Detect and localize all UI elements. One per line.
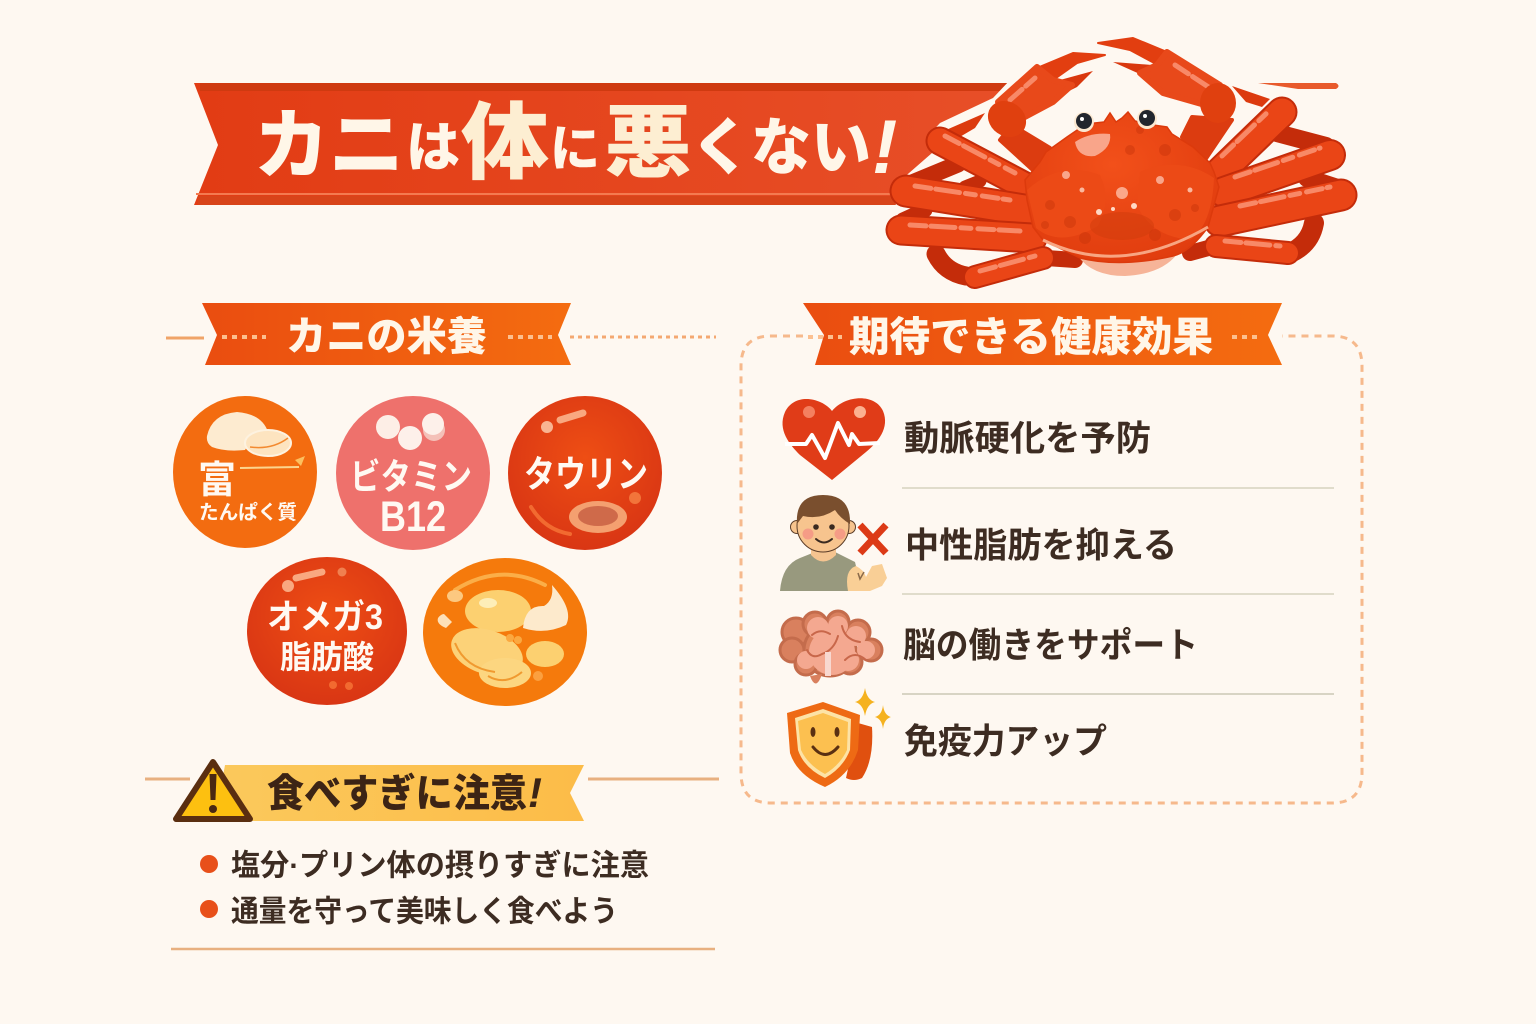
section heading: nutrition bbox=[166, 303, 716, 365]
crab right legs bbox=[1190, 86, 1344, 254]
crab left claw bbox=[981, 53, 1105, 172]
protein shell icon bbox=[207, 412, 291, 456]
nutrient badge: protein: 富 bbox=[198, 460, 236, 502]
title text: 体 bbox=[461, 96, 549, 190]
nutrient badge: omega-3: 脂肪酸 bbox=[280, 639, 374, 675]
title banner bbox=[194, 83, 1100, 205]
nutrient badge: vitamin B12 bbox=[336, 396, 490, 550]
illustration: crab bbox=[901, 38, 1344, 277]
icon: smiling shield bbox=[787, 688, 891, 787]
title text: に bbox=[550, 121, 600, 177]
crab body bbox=[1025, 112, 1219, 263]
warning list item 2: 通量を守って美味しく食べよう bbox=[231, 896, 618, 928]
label: immunity: 免疫力アップ bbox=[904, 722, 1107, 762]
nutrient badge: taurine: タウリン bbox=[524, 454, 648, 495]
nutrient badge: oil foods illustration bbox=[423, 558, 587, 706]
icon: person with cross bbox=[780, 495, 887, 591]
title text: 悪 bbox=[604, 99, 692, 188]
title text: くない bbox=[691, 114, 871, 183]
crab eyes bbox=[1074, 109, 1157, 132]
title text: ! bbox=[872, 105, 897, 190]
icon: warning triangle bbox=[176, 762, 250, 819]
nutrient badge: vitamin B12: ビタミン bbox=[350, 456, 472, 497]
warning heading: ! bbox=[528, 769, 542, 816]
nutrient badge: protein: たんぱく質 bbox=[199, 501, 297, 524]
label: triglycerides: 中性脂肪を抑える bbox=[905, 526, 1177, 566]
title text: は bbox=[406, 118, 460, 178]
nutrient badge: taurine bbox=[508, 396, 662, 550]
nutrient badge: omega-3: オメガ3 bbox=[267, 598, 383, 637]
taurine oyster icon bbox=[569, 501, 627, 533]
crab white cut-out bbox=[893, 80, 1110, 212]
section heading: health benefits bbox=[803, 303, 1282, 365]
title text bbox=[254, 96, 897, 190]
title text: カニ bbox=[254, 104, 404, 189]
icon: heart with pulse bbox=[783, 398, 885, 480]
section heading: health benefits: 期待できる健康効果 bbox=[849, 314, 1213, 360]
warning list item 1: 塩分·プリン体の摂りすぎに注意 bbox=[231, 850, 649, 882]
nutrient badge: protein bbox=[173, 396, 317, 548]
label: arteriosclerosis: 動脈硬化を予防 bbox=[904, 420, 1151, 458]
crab underside bbox=[1078, 250, 1180, 276]
warning heading bbox=[145, 762, 719, 821]
nutrient badge: vitamin B12: B12 bbox=[380, 493, 446, 541]
panel: health benefits dashed frame bbox=[741, 336, 1362, 803]
vitamin capsules icon bbox=[376, 413, 445, 450]
crab shell details bbox=[1027, 126, 1214, 256]
crab right claw bbox=[1098, 38, 1236, 160]
section heading: nutrition: カニの米養 bbox=[286, 315, 487, 359]
crab left legs bbox=[901, 113, 1075, 277]
banner right accent line bbox=[1258, 83, 1338, 89]
icon: brain bbox=[780, 611, 882, 684]
nutrient badge: omega-3 bbox=[247, 557, 407, 705]
warning heading: 食べすぎに注意 bbox=[267, 772, 527, 816]
label: brain function: 脳の働きをサポート bbox=[903, 626, 1198, 666]
